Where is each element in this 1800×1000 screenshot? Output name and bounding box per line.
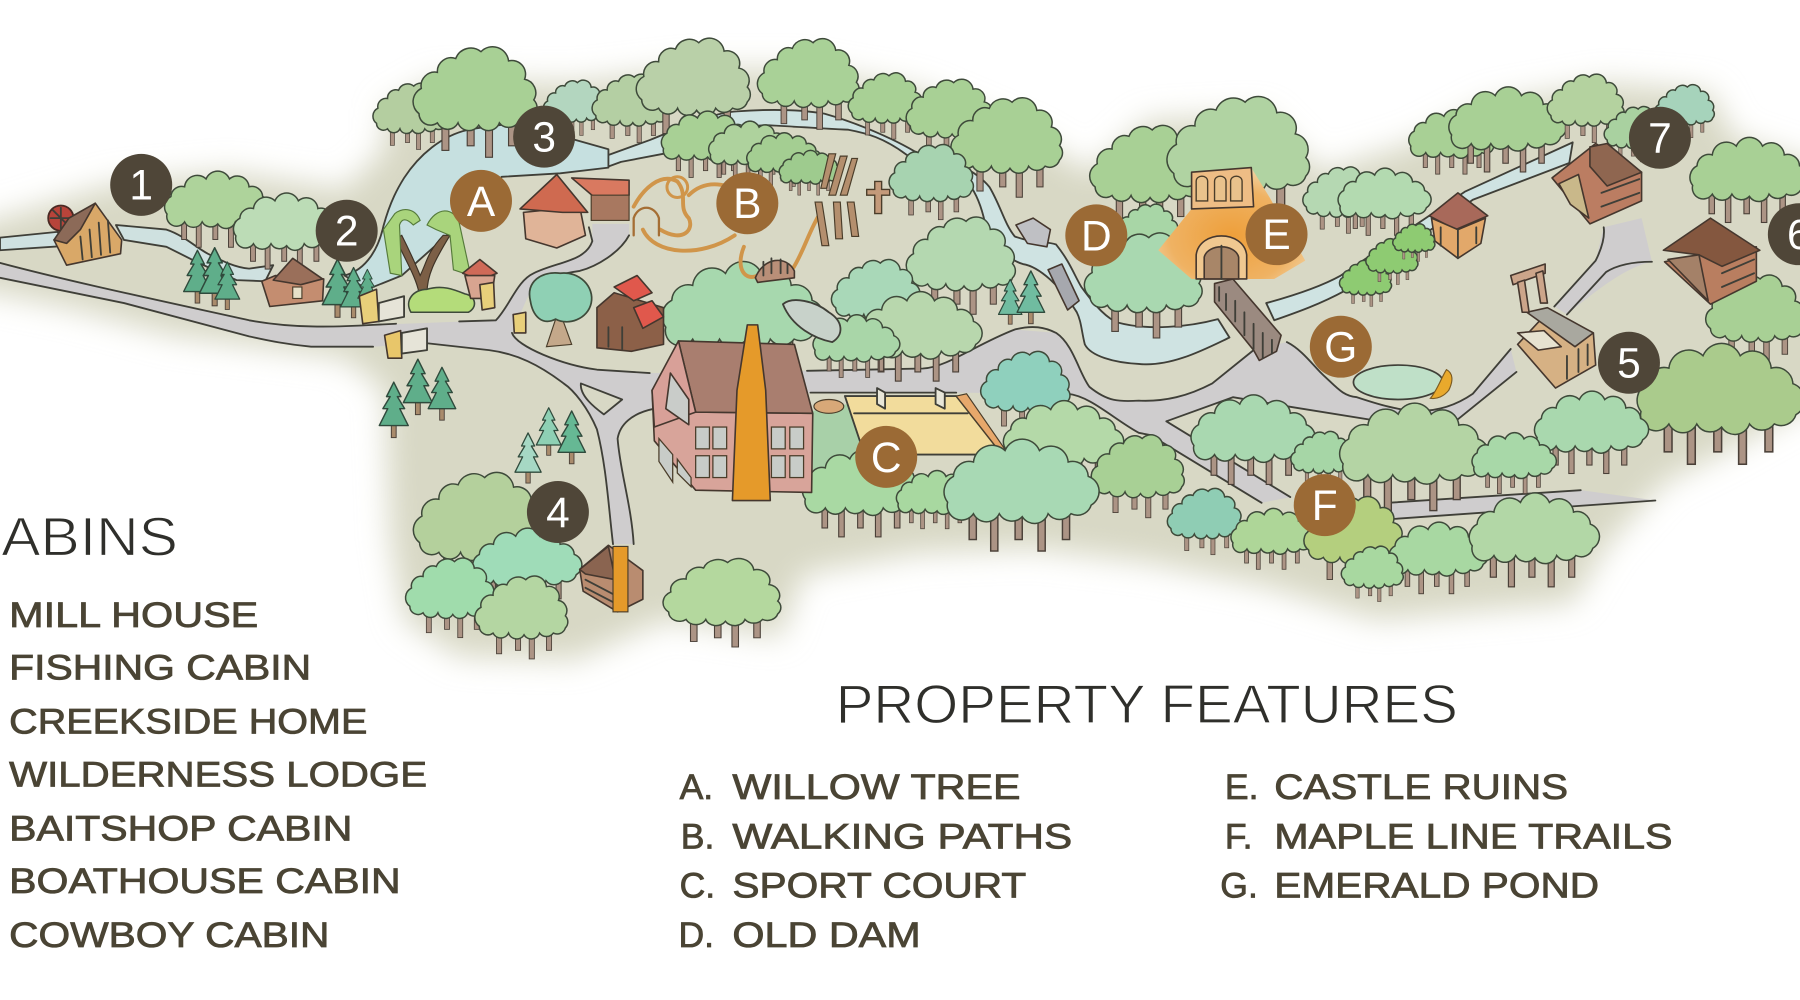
- marker 1: [110, 154, 172, 216]
- list: cabins: CREEKSIDE HOME: [9, 702, 367, 742]
- pines: [184, 248, 1045, 483]
- round tree: [530, 273, 592, 347]
- upper stream: [608, 110, 1229, 364]
- marker 4: [527, 481, 589, 543]
- emerald pond: [1353, 365, 1452, 399]
- cabin 4: wilderness cabin: [580, 545, 643, 612]
- north gate: [359, 289, 404, 324]
- cross: [867, 181, 890, 214]
- red barn: [597, 276, 664, 351]
- list: property features: B.: [681, 816, 714, 856]
- list: property features: D.: [678, 915, 714, 955]
- road network fill: [0, 224, 1516, 544]
- marker 3: 3: [532, 114, 556, 161]
- hedge: [409, 287, 474, 312]
- cabin 1: mill house: [48, 203, 122, 265]
- marker 2: [316, 200, 378, 262]
- gazebo: [1429, 193, 1488, 258]
- list: property features: WALKING PATHS: [732, 816, 1072, 856]
- post: [480, 282, 495, 310]
- cabin 2: fishing cabin: [262, 258, 324, 307]
- marker D: D: [1081, 212, 1112, 259]
- trees: wilderness lodge: [406, 472, 582, 659]
- chimney: [732, 325, 770, 501]
- creek: [0, 110, 1573, 364]
- trees: east: [1534, 275, 1800, 474]
- marker 2: 2: [335, 208, 358, 255]
- marker C: [855, 426, 917, 488]
- gate posts: [359, 282, 526, 358]
- list: property features: C.: [680, 866, 715, 906]
- list: property features: CASTLE RUINS: [1274, 767, 1568, 807]
- cabin markers: [110, 106, 1800, 543]
- pond figure: [1430, 370, 1452, 399]
- hitching arch: [1511, 264, 1547, 312]
- nets: [877, 388, 945, 409]
- list: property features: A.: [680, 767, 713, 807]
- marker D: [1065, 204, 1127, 266]
- list: cabins: MILL HOUSE: [9, 595, 258, 635]
- marker G: G: [1324, 324, 1357, 371]
- marker B: [716, 172, 778, 234]
- marker G: [1310, 316, 1372, 378]
- F trail: [1388, 490, 1655, 519]
- list: property features: MAPLE LINE TRAILS: [1274, 816, 1673, 856]
- list: property features: EMERALD POND: [1274, 866, 1599, 906]
- roads: [0, 218, 1655, 544]
- marker F: [1294, 474, 1356, 536]
- marker 6: [1768, 203, 1800, 265]
- small gazebo: [463, 259, 497, 298]
- list: property features: SPORT COURT: [732, 866, 1026, 906]
- willow tree: [383, 210, 471, 293]
- cabin roads: [1554, 218, 1652, 315]
- trees: north east ridge: [1409, 74, 1800, 222]
- list: cabins: COWBOY CABIN: [9, 915, 329, 955]
- dam houses: [1016, 218, 1079, 310]
- list: cabins: FISHING CABIN: [9, 648, 311, 688]
- trees: centre grove: [662, 217, 1015, 381]
- marker 1: 1: [129, 162, 153, 209]
- marker 4: 4: [546, 489, 570, 536]
- marker A: [450, 170, 512, 232]
- list: property features: G.: [1220, 866, 1258, 906]
- marker 7: 7: [1648, 115, 1672, 162]
- marker E: E: [1262, 211, 1291, 258]
- heading: property features: PROPERTY FEATURES: [836, 673, 1458, 735]
- sport court area: [813, 388, 1010, 494]
- old dam: [1215, 279, 1281, 360]
- trees: north ridge: [373, 38, 1063, 197]
- tree chain on stream: [1339, 224, 1435, 306]
- cabin 7: cowboy cabin: [1552, 144, 1642, 224]
- marker 5: 5: [1617, 340, 1641, 387]
- marker B: B: [733, 180, 761, 227]
- marker E: [1246, 203, 1308, 265]
- lake: [344, 124, 608, 289]
- terrain wash: [0, 69, 1800, 660]
- cabin 5: baitshop cabin: [1518, 308, 1596, 388]
- trees: south band: [1191, 395, 1556, 511]
- path arch: [634, 208, 659, 235]
- list: cabins: BOATHOUSE CABIN: [9, 861, 401, 901]
- trees: sport court: [803, 351, 1184, 551]
- fire ring: [814, 399, 844, 413]
- wilderness lodge: [652, 325, 813, 501]
- marker 3: [513, 106, 575, 168]
- traffic island: [581, 383, 622, 414]
- road edges: [0, 227, 629, 327]
- marker F: F: [1312, 482, 1338, 529]
- cabin 6: boathouse cabin: [1663, 218, 1760, 304]
- trees: fishing creek: [165, 171, 339, 269]
- list: cabins: BAITSHOP CABIN: [9, 808, 352, 848]
- list: property features: [678, 767, 1673, 955]
- picnic lawn: [813, 404, 863, 494]
- marker C: C: [871, 434, 902, 481]
- trees: maple line: [1167, 488, 1599, 602]
- castle ruins: [1158, 168, 1305, 279]
- mill race: [0, 225, 273, 281]
- list: cabins: WILDERNESS LODGE: [9, 754, 427, 794]
- trees: dam and ruins: [1084, 96, 1431, 338]
- marker 5: [1598, 332, 1660, 394]
- post: [513, 312, 526, 333]
- south gate: [385, 328, 427, 358]
- trees: south clearing: [663, 559, 781, 647]
- orchard posts: [815, 154, 859, 246]
- trees: walking paths: [661, 111, 973, 220]
- list: cabins: [9, 595, 427, 955]
- feature markers: [450, 170, 1372, 536]
- walking paths: [634, 177, 821, 277]
- marker 7: [1629, 107, 1691, 169]
- list: property features: OLD DAM: [732, 915, 921, 955]
- creek house: [520, 174, 629, 248]
- side bench: [956, 394, 1010, 457]
- water wheel: [48, 205, 73, 231]
- court: [845, 396, 1002, 455]
- list: property features: WILLOW TREE: [732, 767, 1021, 807]
- list: property features: F.: [1225, 816, 1253, 856]
- lower stream: [1266, 142, 1573, 320]
- marker A: A: [467, 178, 496, 225]
- footbridge: [755, 258, 794, 282]
- list: property features: E.: [1225, 767, 1258, 807]
- tree groups: [165, 38, 1800, 659]
- grey boulder: [783, 300, 840, 342]
